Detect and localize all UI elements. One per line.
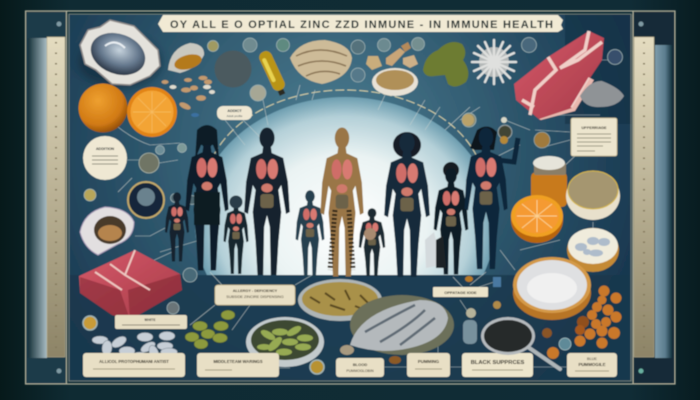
food: nuggets and tan bowl [366, 42, 418, 96]
main panel [68, 14, 632, 382]
small brown seeds bottom [389, 276, 501, 364]
left ruler strip [47, 37, 65, 357]
note circle: ADDITION [96, 147, 114, 151]
figure: child 2 [224, 196, 248, 274]
food: lentil bowl [298, 279, 382, 321]
title banner [158, 15, 563, 32]
central light halo [194, 88, 490, 276]
food: half orange [127, 87, 177, 137]
food: oil capsule [257, 49, 289, 97]
tablets bowl [567, 228, 619, 272]
bottom label: black supplements [462, 353, 533, 377]
figure: woman holding sample [464, 126, 518, 269]
small stone icon [139, 153, 159, 173]
label: middle left: WHITE [145, 318, 156, 322]
food: small oyster with yolk [168, 43, 204, 73]
small food cluster [462, 114, 550, 148]
food: top steak [514, 31, 604, 120]
figure: small child left [165, 192, 189, 262]
figure: child 4 [359, 208, 385, 276]
label: middle left [115, 315, 187, 329]
figure: woman with afro [384, 132, 430, 277]
small icon circles row [83, 38, 622, 374]
bottom label: blood [336, 358, 384, 377]
right ruler strip [634, 37, 654, 357]
food: silver fish dish [340, 295, 454, 355]
bottom label: nutrition [197, 353, 279, 377]
grain bowl [566, 171, 620, 220]
note circle [83, 136, 127, 180]
figure: girl with bag [425, 162, 468, 275]
right decorative column [633, 12, 675, 384]
title banner: OY ALL E O OPTIAL ZINC ZZD INMUNE - IN IMMUNE HEALTH [170, 19, 553, 31]
food: half orange right [511, 195, 563, 243]
bottom label: alcohol [83, 353, 185, 377]
bottom label: blue pummogile [567, 353, 617, 377]
food: lower steak [79, 250, 182, 320]
food: whole orange [78, 84, 128, 132]
food: grey ball [214, 50, 252, 88]
gold ring portrait [128, 182, 164, 218]
capsule icon [559, 338, 571, 350]
bottom label: blood: BLOOD [353, 362, 367, 367]
bottom label: nutrition: MIDDLETEAM WARINGS [213, 359, 263, 364]
food: green seed bowl [246, 317, 324, 367]
label: middle centre: SUBSIDE ZINCIRE DISPENSING [226, 295, 284, 299]
food: large oyster [78, 20, 162, 88]
food: broccoli [423, 42, 468, 87]
figure: woman 1 [185, 125, 229, 271]
food: green beans [185, 310, 235, 349]
bottom label: blue pummogile: PUMMOGILE [578, 362, 606, 367]
label: adult top left [217, 106, 252, 120]
grey rock [580, 81, 624, 107]
virus ball [472, 40, 516, 84]
ampoule icons [463, 277, 501, 344]
bottom label: pumming [407, 353, 450, 377]
food: white pills [92, 332, 178, 362]
label: middle centre: ALLERGY - DEFICIENCY [233, 289, 278, 293]
label: adult top left: ADDICT [227, 109, 242, 113]
label: middle centre [215, 285, 295, 305]
shell lower left [80, 207, 134, 255]
figure: child 3 [296, 190, 324, 276]
bottom label: blood: PUMMOGLOBIN [346, 369, 374, 373]
bottom label: pumming: PUMMING [418, 359, 440, 364]
figure: golden woman [320, 128, 364, 276]
orange tablets [542, 286, 622, 359]
label: opportunities [433, 287, 488, 297]
food: clam [290, 40, 352, 84]
powder bowl [513, 257, 591, 320]
figure: man [244, 128, 290, 275]
note card right: UPPERRIAGE [581, 126, 607, 130]
people figures [165, 125, 518, 277]
note card right [571, 118, 617, 156]
bottom label: alcohol: ALLICOL PROTOPHUMANI ANTIST [99, 359, 169, 364]
bottom label: blue pummogile: BLUE [587, 357, 597, 361]
left decorative column [26, 12, 66, 384]
food: seeds scatter [162, 76, 215, 117]
bottom label row [83, 353, 617, 377]
jar [531, 156, 567, 207]
connector lines [105, 60, 620, 368]
label: adult top left: Adult profile [227, 114, 243, 118]
bottom label: black supplements: BLACK SUPPRCES [471, 360, 525, 366]
black seed spoon [481, 317, 560, 369]
label: opportunities: OPPATAGE IODE [444, 290, 477, 295]
